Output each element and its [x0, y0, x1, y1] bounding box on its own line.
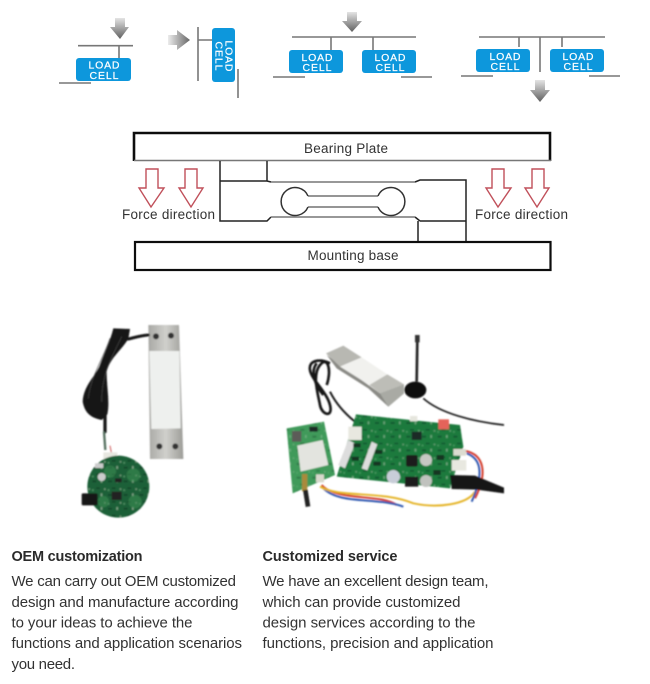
paragraph: Customized service: design services according to the	[262, 614, 476, 632]
antenna	[404, 335, 504, 425]
icon: single load cell compression	[59, 18, 133, 83]
bearing plate: Bearing Plate	[304, 141, 388, 156]
icon: dual load cell tension	[461, 37, 620, 102]
photo: load cell with wireless transmitter boards and antenna	[287, 335, 504, 507]
icon: single load cell compression: LOAD	[88, 60, 120, 72]
mounting base: Mounting base	[308, 248, 398, 263]
icon: dual load cell compression: LOAD	[374, 52, 406, 64]
connector	[103, 452, 117, 459]
icon: dual load cell compression	[273, 12, 432, 77]
label: right force direction: Force direction	[475, 207, 568, 222]
icon: dual load cell tension: LOAD	[562, 51, 594, 63]
photo: load cell with round circuit board	[82, 325, 183, 518]
paragraph: Customized service: functions, precision and application	[262, 635, 494, 652]
force diagram	[122, 133, 568, 270]
icon: side mounted load cell	[168, 27, 238, 98]
icon: dual load cell compression: LOAD	[302, 52, 333, 64]
icon: dual load cell tension: CELL	[490, 61, 520, 73]
label: left force direction: Force direction	[122, 207, 215, 222]
column: Customized service	[262, 549, 494, 652]
main circuit board	[337, 414, 466, 488]
wires	[320, 451, 483, 507]
paragraph: OEM customization: design and manufacture according	[12, 594, 238, 611]
arrows: right force direction	[486, 169, 549, 207]
paragraph: Customized service: We have an excellent design team,	[262, 573, 488, 590]
heading: Customized service: Customized service	[262, 549, 398, 565]
paragraph: OEM customization: you need.	[12, 656, 75, 673]
paragraph: OEM customization: We can carry out OEM customized	[12, 573, 236, 590]
load cell outline	[220, 161, 466, 242]
transmitter board	[287, 422, 335, 507]
power plug	[450, 475, 504, 493]
icon: side mounted load cell: CELL	[212, 42, 224, 71]
heading: OEM customization: OEM customization	[12, 549, 142, 565]
paragraph: OEM customization: to your ideas to achieve the	[12, 614, 192, 632]
cable	[310, 361, 355, 422]
bearing plate	[134, 133, 551, 161]
paragraph: Customized service: which can provide customized	[262, 594, 460, 611]
paragraph: OEM customization	[12, 573, 242, 673]
icon: side mounted load cell: LOAD	[222, 40, 234, 72]
icon: dual load cell tension: CELL	[564, 61, 593, 73]
icon: dual load cell tension: LOAD	[490, 51, 521, 63]
column: OEM customization	[12, 549, 242, 673]
icon: single load cell compression: CELL	[90, 70, 119, 82]
paragraph: OEM customization: functions and application scenarios	[12, 635, 242, 652]
arrows: left force direction	[139, 169, 203, 207]
icon: dual load cell compression: CELL	[376, 62, 405, 74]
load cell body	[326, 346, 404, 407]
icon: dual load cell compression: CELL	[302, 62, 332, 74]
mounting base	[135, 242, 550, 270]
paragraph: Customized service	[262, 573, 494, 652]
